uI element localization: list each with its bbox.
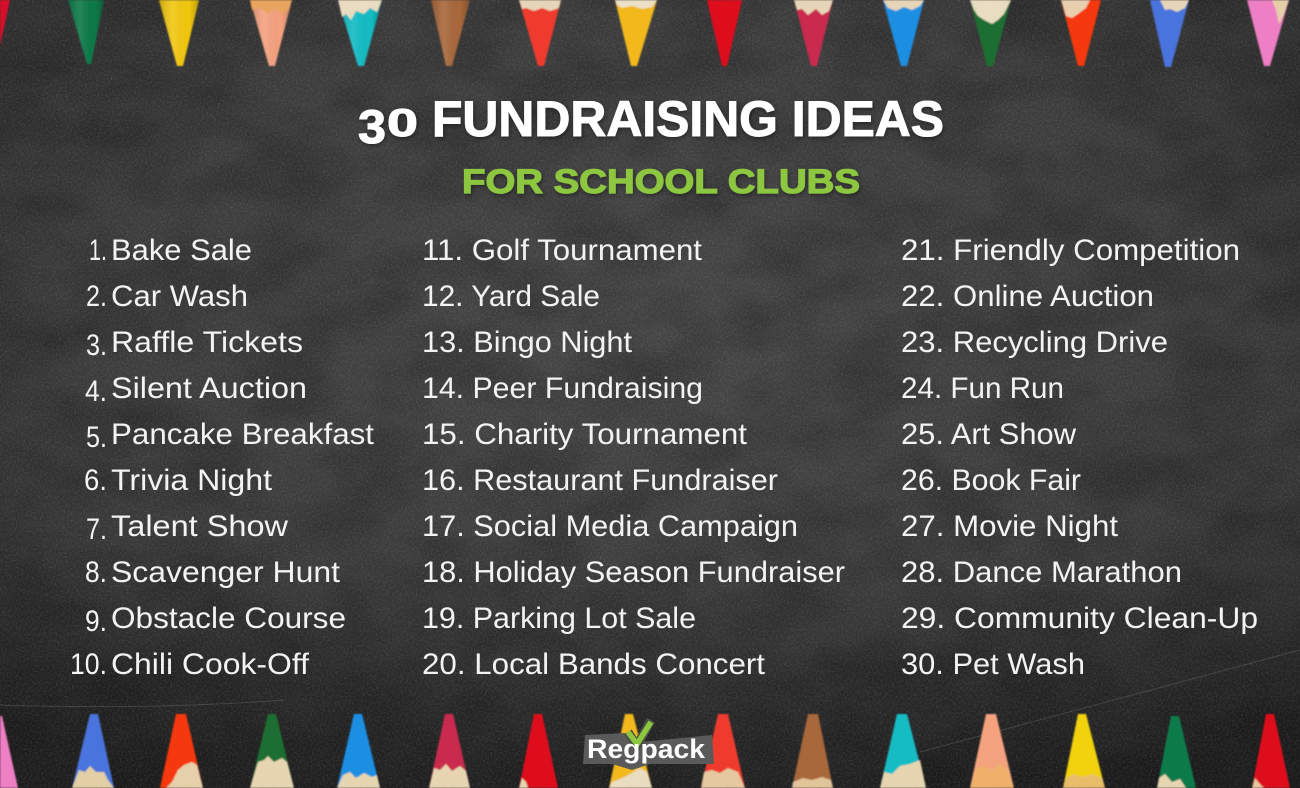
item 7: 7. <box>86 513 107 546</box>
title: 0 <box>387 102 418 145</box>
title: FUNDRAISING IDEAS <box>432 91 944 147</box>
logo: Regpack <box>583 720 714 770</box>
pencil: periwinkle <box>1150 0 1189 67</box>
pencil: pink <box>0 716 18 788</box>
pencil: teal <box>338 0 382 66</box>
item 16: 16. Restaurant Fundraiser <box>422 464 778 497</box>
item 6: 6. <box>84 464 107 497</box>
pencil: amber <box>615 0 657 66</box>
pencil: red <box>707 0 742 66</box>
item 28: 28. Dance Marathon <box>901 556 1182 589</box>
pencil: amber <box>609 714 652 788</box>
item 8: 8. <box>85 556 107 589</box>
pencil: red edge <box>0 0 10 46</box>
pencil: green <box>1157 716 1196 788</box>
item 1: 1. <box>89 234 107 267</box>
pencil: crimson <box>794 0 833 66</box>
item 7: Talent Show <box>111 510 288 543</box>
item 23: 23. Recycling Drive <box>901 326 1168 359</box>
pencil: dark green <box>970 0 1011 66</box>
item 3: Raffle Tickets <box>111 326 303 359</box>
item 15: 15. Charity Tournament <box>422 418 748 451</box>
pencil: red right <box>1252 714 1290 788</box>
list column 2 <box>422 234 845 681</box>
item 9: Obstacle Course <box>111 602 346 635</box>
pencil: periwinkle <box>72 714 114 788</box>
item 19: 19. Parking Lot Sale <box>422 602 696 635</box>
item 17: 17. Social Media Campaign <box>422 510 798 543</box>
pencil: brown <box>792 714 833 788</box>
item 13: 13. Bingo Night <box>422 326 633 359</box>
item 29: 29. Community Clean-Up <box>901 602 1258 635</box>
item 21: 21. Friendly Competition <box>901 234 1240 267</box>
pencil: teal <box>880 714 926 788</box>
item 22: 22. Online Auction <box>901 280 1154 313</box>
pencil: green <box>68 0 104 64</box>
item 9: 9. <box>85 605 107 638</box>
item 4: 4. <box>85 375 107 408</box>
title: 3 <box>358 100 386 153</box>
item 4: Silent Auction <box>111 372 307 405</box>
pencil: peach <box>970 714 1014 788</box>
item 11: 11. Golf Tournament <box>422 234 703 267</box>
subtitle: FOR SCHOOL CLUBS <box>462 163 860 201</box>
pencil: blue <box>883 0 924 66</box>
pencil: orange <box>1061 0 1101 66</box>
item 27: 27. Movie Night <box>901 510 1119 543</box>
list column 1 <box>70 234 375 681</box>
pencil: peach <box>250 0 292 66</box>
item 14: 14. Peer Fundraising <box>422 372 703 405</box>
item 5: Pancake Breakfast <box>111 418 375 451</box>
item 30: 30. Pet Wash <box>901 648 1085 681</box>
item 12: 12. Yard Sale <box>422 280 600 313</box>
pencil: crimson <box>429 714 470 788</box>
item 6: Trivia Night <box>111 464 273 497</box>
item 26: 26. Book Fair <box>901 464 1081 497</box>
pencil: yellow <box>1063 714 1105 788</box>
pencil: red <box>519 714 558 788</box>
item 10: 10. <box>70 648 107 681</box>
item 2: Car Wash <box>111 280 248 313</box>
pencil: yellow <box>159 0 199 66</box>
pencil: blue <box>337 714 380 788</box>
item 10: Chili Cook-Off <box>111 648 310 681</box>
item 20: 20. Local Bands Concert <box>422 648 766 681</box>
pencil: orange <box>160 714 203 788</box>
item 8: Scavenger Hunt <box>111 556 341 589</box>
item 2: 2. <box>86 280 107 313</box>
pencil: brown <box>431 0 470 66</box>
item 25: 25. Art Show <box>901 418 1076 451</box>
bottom row of coloured pencils <box>0 714 1290 788</box>
item 18: 18. Holiday Season Fundraiser <box>422 556 845 589</box>
item 24: 24. Fun Run <box>901 372 1064 405</box>
logo wordmark: Regpack <box>587 734 706 764</box>
pencil: pink <box>1247 0 1289 66</box>
item 5: 5. <box>86 421 107 454</box>
pencil: dark green <box>250 714 294 788</box>
pencil: red-orange <box>701 714 745 788</box>
item 1: Bake Sale <box>111 234 252 267</box>
list column 3 <box>901 234 1258 681</box>
pencil: red-orange <box>519 0 561 66</box>
item 3: 3. <box>86 329 107 362</box>
top row of coloured pencils <box>0 0 1289 67</box>
icon: green check <box>628 720 651 746</box>
